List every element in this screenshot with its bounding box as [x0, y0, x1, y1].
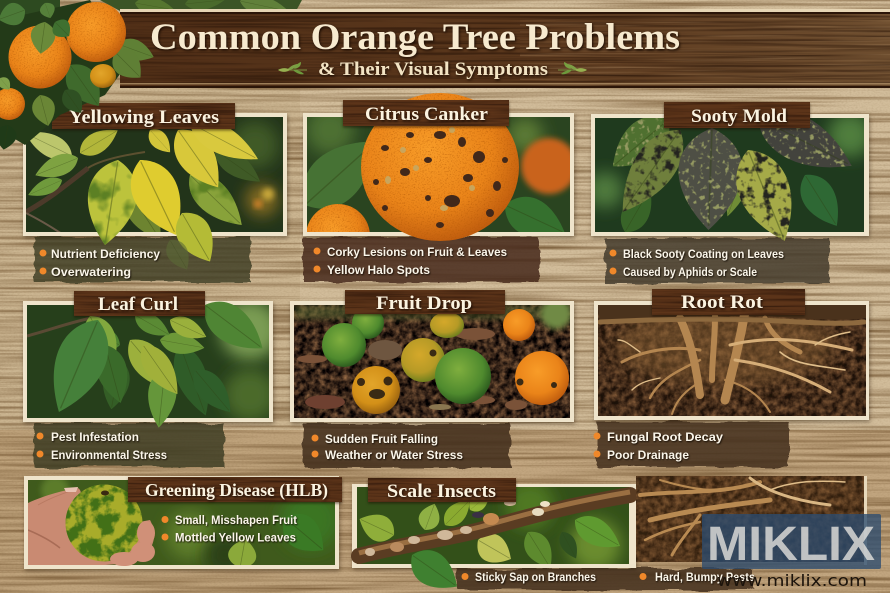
symptom swatch: [457, 569, 753, 590]
symptom swatch: [34, 423, 224, 467]
front leaves: [0, 0, 76, 93]
symptom swatch: [34, 237, 250, 282]
bullet list: Mottled Yellow Leaves: [175, 530, 296, 544]
symptom swatch: [303, 424, 510, 468]
subtitle: & Their Visual Symptoms: [318, 59, 548, 80]
heading: Scale Insects: [387, 481, 496, 502]
orange bottom: [0, 88, 25, 120]
panel: scale insects and roots strip: [352, 476, 867, 593]
roots photo: [636, 476, 864, 562]
bullet list: [162, 513, 297, 544]
watermark url: www.miklix.com: [717, 571, 867, 590]
bullet list: [314, 245, 507, 277]
photo: [27, 305, 269, 418]
heading: Root Rot: [681, 292, 764, 313]
bullet list: Caused by Aphids or Scale: [623, 265, 757, 279]
panel: greening disease: [24, 476, 342, 575]
heading plank: [652, 289, 805, 315]
photo frame: [303, 113, 574, 236]
photo: [28, 480, 335, 565]
bullet list: [312, 432, 463, 462]
heading plank: [52, 103, 235, 129]
heading: Yellowing Leaves: [69, 107, 219, 128]
bullet list: Corky Lesions on Fruit & Leaves: [327, 245, 507, 259]
bullet list: Sticky Sap on Branches: [475, 570, 596, 584]
panel: yellowing leaves: [20, 103, 287, 282]
leaves behind oranges: [0, 0, 157, 151]
icon: right sprig: [558, 62, 587, 74]
watermark: [702, 514, 881, 590]
bullet list: [610, 247, 784, 279]
panel: fruit drop: [290, 290, 574, 468]
panel: leaf curl: [23, 291, 280, 467]
bullet list: Yellow Halo Spots: [327, 263, 430, 277]
orange top: [66, 2, 126, 62]
watermark name: MIKLIX: [707, 518, 875, 571]
bullet list: Sudden Fruit Falling: [325, 432, 438, 446]
branch with scale insects: [359, 492, 630, 556]
bullet list: Poor Drainage: [607, 448, 689, 462]
symptom swatch: [597, 422, 789, 467]
photo: [307, 117, 570, 232]
title: Common Orange Tree Problems: [150, 16, 680, 57]
heading plank: [74, 291, 205, 316]
photo: [357, 487, 629, 564]
bullet list: Hard, Bumpy Pests: [655, 570, 755, 584]
orange tree corner: [0, 0, 157, 151]
header plank: [120, 9, 890, 88]
heading plank: [368, 478, 516, 502]
bullet list: Black Sooty Coating on Leaves: [623, 247, 784, 261]
symptom swatch: [303, 237, 539, 282]
photo frame: [352, 484, 636, 568]
photo: [595, 118, 864, 232]
photo frame: [290, 301, 574, 422]
bullet list: [40, 247, 160, 279]
bullet list: [462, 570, 755, 584]
symptom swatch: [605, 238, 829, 283]
bullet list: [594, 430, 723, 462]
bullet list: Nutrient Deficiency: [51, 247, 160, 261]
bullet list: Environmental Stress: [51, 448, 167, 462]
watermark panel: [702, 514, 881, 569]
photo frame: [23, 301, 273, 422]
heading: Leaf Curl: [98, 294, 178, 315]
icon: left sprig: [278, 62, 307, 74]
photo: [294, 299, 571, 418]
heading plank: [345, 290, 505, 314]
bullet list: [36, 430, 167, 462]
overflowing leaves: [36, 291, 273, 429]
panel: sooty mold: [587, 98, 872, 283]
frame edge right: [864, 476, 867, 565]
photo frame: [24, 476, 339, 569]
diseased orange: [361, 93, 519, 241]
hand holding fruit: [28, 487, 154, 566]
fingers: [110, 521, 155, 566]
heading: Sooty Mold: [691, 106, 787, 127]
photo: [26, 117, 283, 232]
heading plank: [664, 102, 810, 128]
bullet list: Fungal Root Decay: [607, 430, 723, 444]
bullet list: Small, Misshapen Fruit: [175, 513, 297, 527]
overflowing leaves: [81, 111, 265, 275]
small orange behind: [90, 64, 116, 88]
overflowing sooty leaves: [676, 98, 862, 250]
heading: Citrus Canker: [365, 104, 489, 125]
bullet list: Overwatering: [51, 265, 131, 279]
photo frame: [23, 113, 287, 236]
bullet list: Pest Infestation: [51, 430, 139, 444]
photo frame: [591, 114, 869, 236]
overflowing leaf: [402, 541, 467, 593]
heading: Greening Disease (HLB): [145, 480, 328, 501]
green fruit: [66, 484, 142, 562]
heading plank: [128, 477, 342, 502]
bullet list: Weather or Water Stress: [325, 448, 463, 462]
photo frame: [594, 301, 869, 420]
top foliage strip: [100, 0, 302, 21]
heading plank: [343, 100, 509, 126]
photo: [598, 305, 866, 416]
heading: Fruit Drop: [376, 293, 472, 314]
panel: root rot: [594, 289, 869, 467]
panel: citrus canker: [288, 93, 577, 282]
orange left: [8, 26, 72, 88]
